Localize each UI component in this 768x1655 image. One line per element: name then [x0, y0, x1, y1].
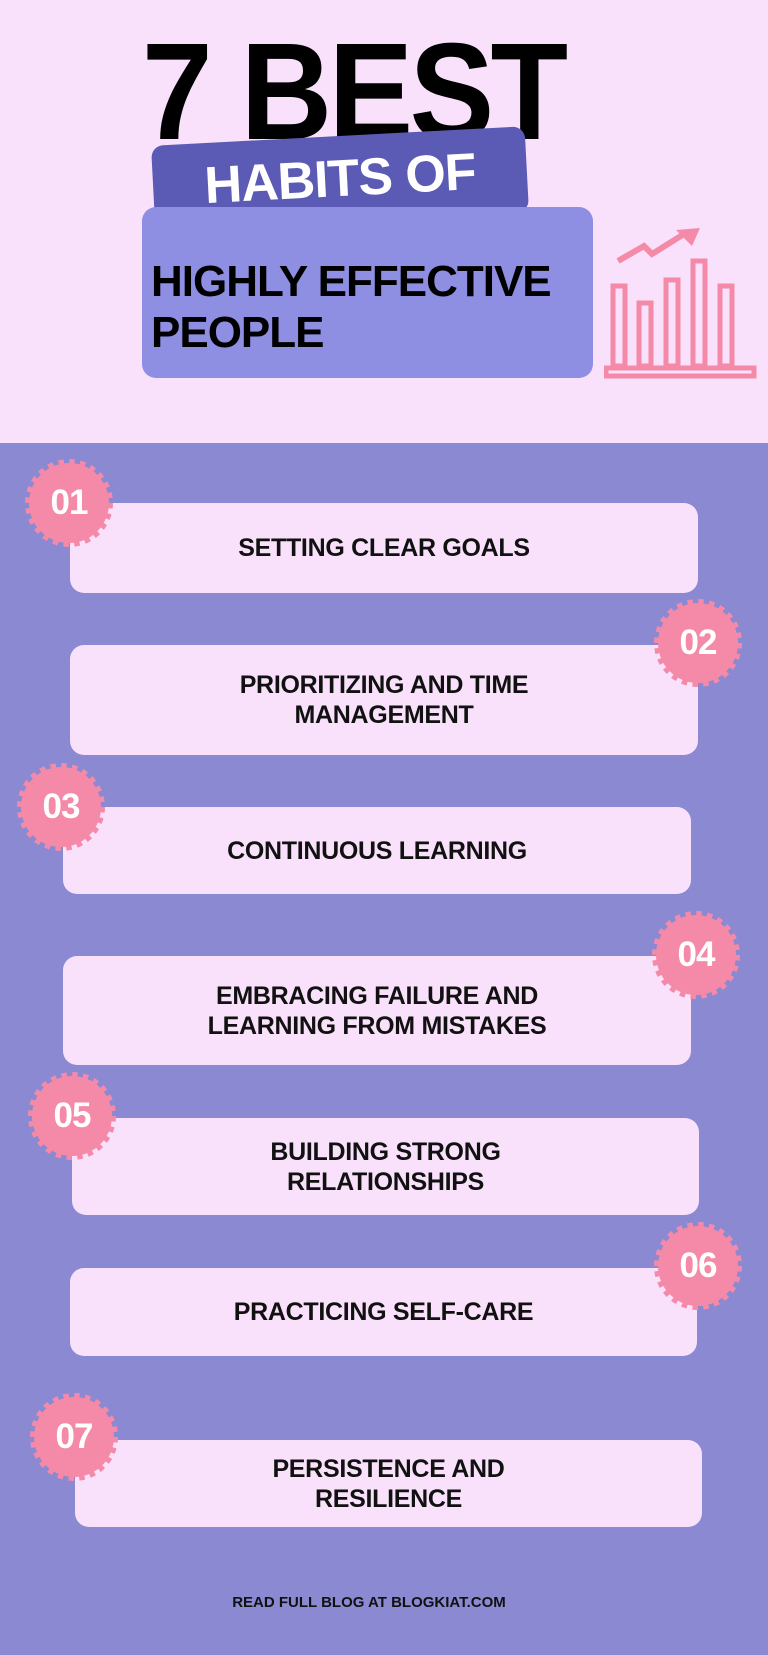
badge 02 [654, 599, 742, 687]
card 3 [63, 807, 691, 894]
text: highly effective people [151, 257, 551, 357]
badge 05 [28, 1072, 116, 1160]
card 1 [70, 503, 698, 593]
subtitle box: habits of: HABITS OF [203, 143, 477, 215]
badge 03: 03 [43, 787, 79, 826]
badge 04: 04 [678, 935, 714, 974]
card 1: SETTING CLEAR GOALS [238, 534, 530, 562]
card 4 [63, 956, 691, 1065]
card 7 [75, 1440, 702, 1527]
badge 07: 07 [56, 1417, 92, 1456]
card 3: CONTINUOUS LEARNING [227, 836, 527, 864]
title: 7 BEST: 7 BEST [142, 15, 564, 169]
card 2: PRIORITIZING AND TIME [240, 671, 528, 699]
badge 02: 02 [680, 623, 716, 662]
badge 06 [654, 1222, 742, 1310]
text: highly effective people: HIGHLY EFFECTIVE [151, 257, 551, 306]
card 5: BUILDING STRONG [270, 1138, 501, 1166]
card 5 [72, 1118, 699, 1215]
card 6 [70, 1268, 697, 1356]
card 5: RELATIONSHIPS [287, 1168, 484, 1196]
badge 07 [30, 1393, 118, 1481]
footer text: READ FULL BLOG AT BLOGKIAT.COM [232, 1594, 506, 1611]
card 7: PERSISTENCE AND [272, 1454, 505, 1482]
card 7: RESILIENCE [315, 1484, 462, 1512]
subtitle box: highly effective people [142, 207, 593, 378]
badge 01: 01 [51, 483, 87, 522]
badge 04 [652, 911, 740, 999]
badge 06: 06 [680, 1246, 716, 1285]
header panel [0, 0, 768, 443]
card 2 [70, 645, 698, 755]
badge 01 [25, 459, 113, 547]
card 4: LEARNING FROM MISTAKES [208, 1012, 546, 1040]
badge 05: 05 [54, 1096, 90, 1135]
badge 03 [17, 763, 105, 851]
text: highly effective people: PEOPLE [151, 308, 324, 357]
subtitle box: habits of [151, 126, 529, 232]
card 6: PRACTICING SELF-CARE [234, 1298, 533, 1326]
card 2: MANAGEMENT [295, 701, 473, 729]
icon: bar chart [604, 228, 756, 378]
card 4: EMBRACING FAILURE AND [216, 982, 538, 1010]
